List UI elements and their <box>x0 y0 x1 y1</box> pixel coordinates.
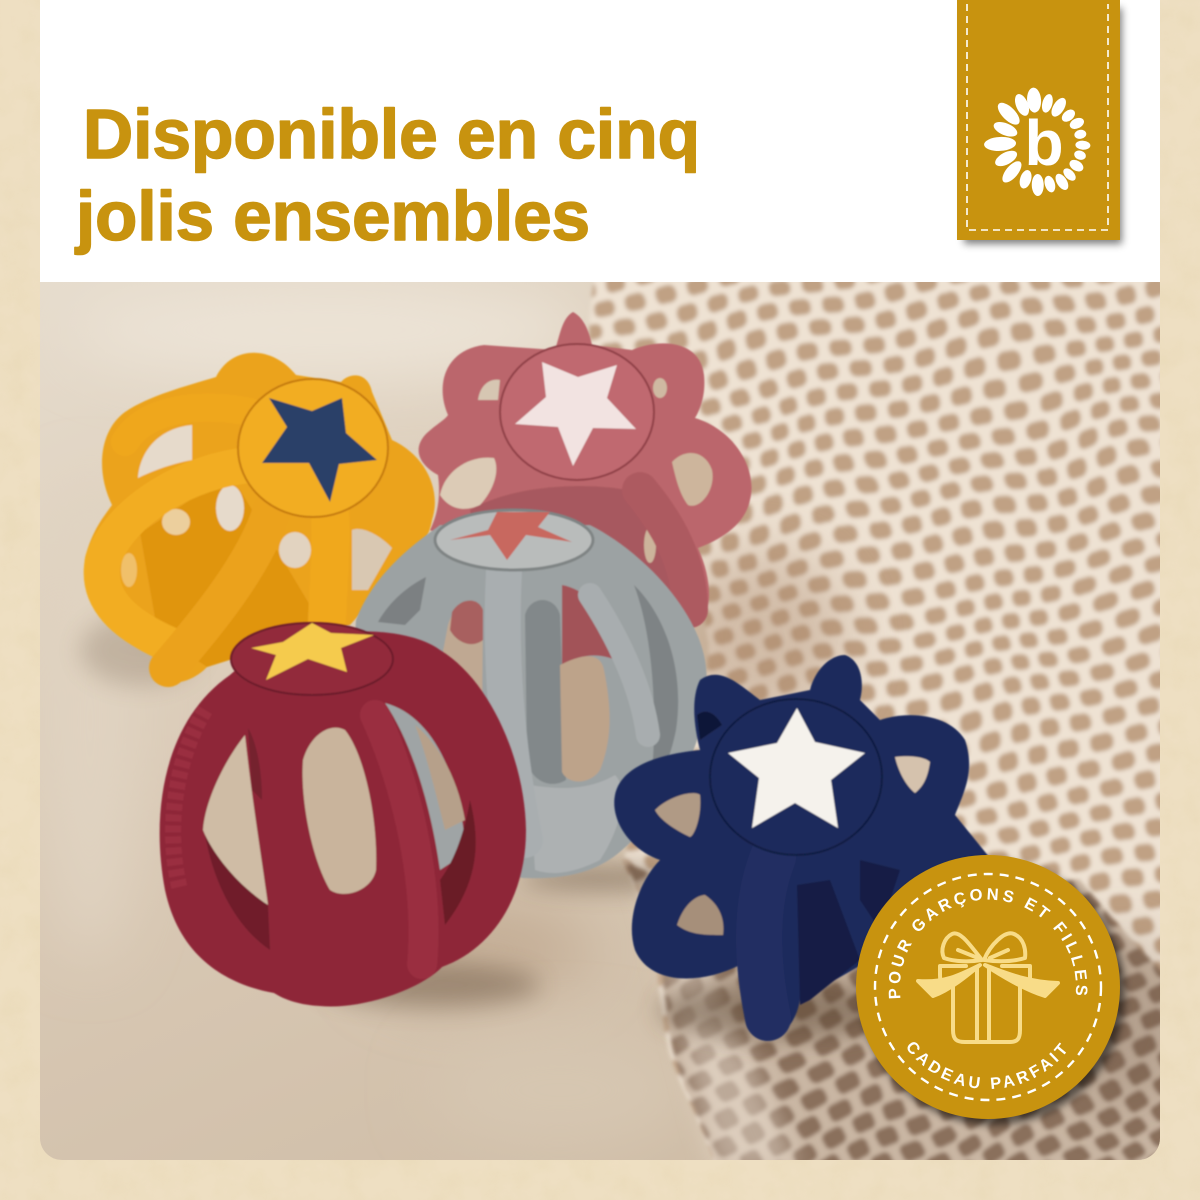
star: coral <box>450 512 572 560</box>
toy: grey ball <box>356 510 707 878</box>
photo panel <box>40 270 1190 1190</box>
yellow disc <box>238 379 388 517</box>
pink disc <box>500 344 654 480</box>
waffle blanket <box>588 270 1190 1190</box>
badge: cadeau parfait <box>856 855 1130 1130</box>
icon: gift <box>918 933 1058 1042</box>
tag: logo label <box>957 0 1122 244</box>
yellow holes <box>121 425 392 590</box>
icon: sunflower logo <box>984 87 1091 196</box>
ribbed spoke <box>375 715 424 965</box>
linen fabric <box>40 282 714 1160</box>
maroon holes <box>203 703 476 950</box>
toy shadows <box>80 614 900 1040</box>
toy: pink ball <box>419 312 752 650</box>
ribbed grip <box>590 595 648 735</box>
maroon disc <box>231 623 393 695</box>
navy spoke <box>759 857 773 1018</box>
yellow shaded belly <box>140 489 308 668</box>
toy: navy ball <box>614 655 990 1040</box>
grey holes <box>378 577 678 790</box>
toy: yellow ball <box>84 353 435 683</box>
star: yellow <box>251 623 374 680</box>
badge text: top: POUR GARÇONS ET FILLES <box>888 888 1088 998</box>
pink lower shade <box>470 486 670 590</box>
star: pale pink <box>515 362 636 466</box>
grey disc <box>435 510 593 570</box>
toy: maroon ball <box>160 623 526 1007</box>
title: jolis ensembles <box>74 177 590 255</box>
title: Disponible en cinq <box>83 95 700 173</box>
yellow spokes <box>102 408 331 668</box>
lighter bowl <box>530 775 622 873</box>
ribbed spoke <box>640 490 690 610</box>
star: navy <box>262 398 377 502</box>
title <box>74 95 700 255</box>
navy holes <box>655 712 930 1005</box>
star: white <box>728 708 865 828</box>
badge text: bottom: CADEAU PARFAIT <box>908 1042 1066 1089</box>
pink holes <box>440 378 713 563</box>
header panel <box>40 0 1160 282</box>
icon: sunflower logo: b <box>1024 107 1064 179</box>
spokes <box>503 570 525 840</box>
navy disc <box>710 699 882 855</box>
ribbed rim <box>173 710 205 890</box>
fabric folds and light <box>40 280 690 1150</box>
